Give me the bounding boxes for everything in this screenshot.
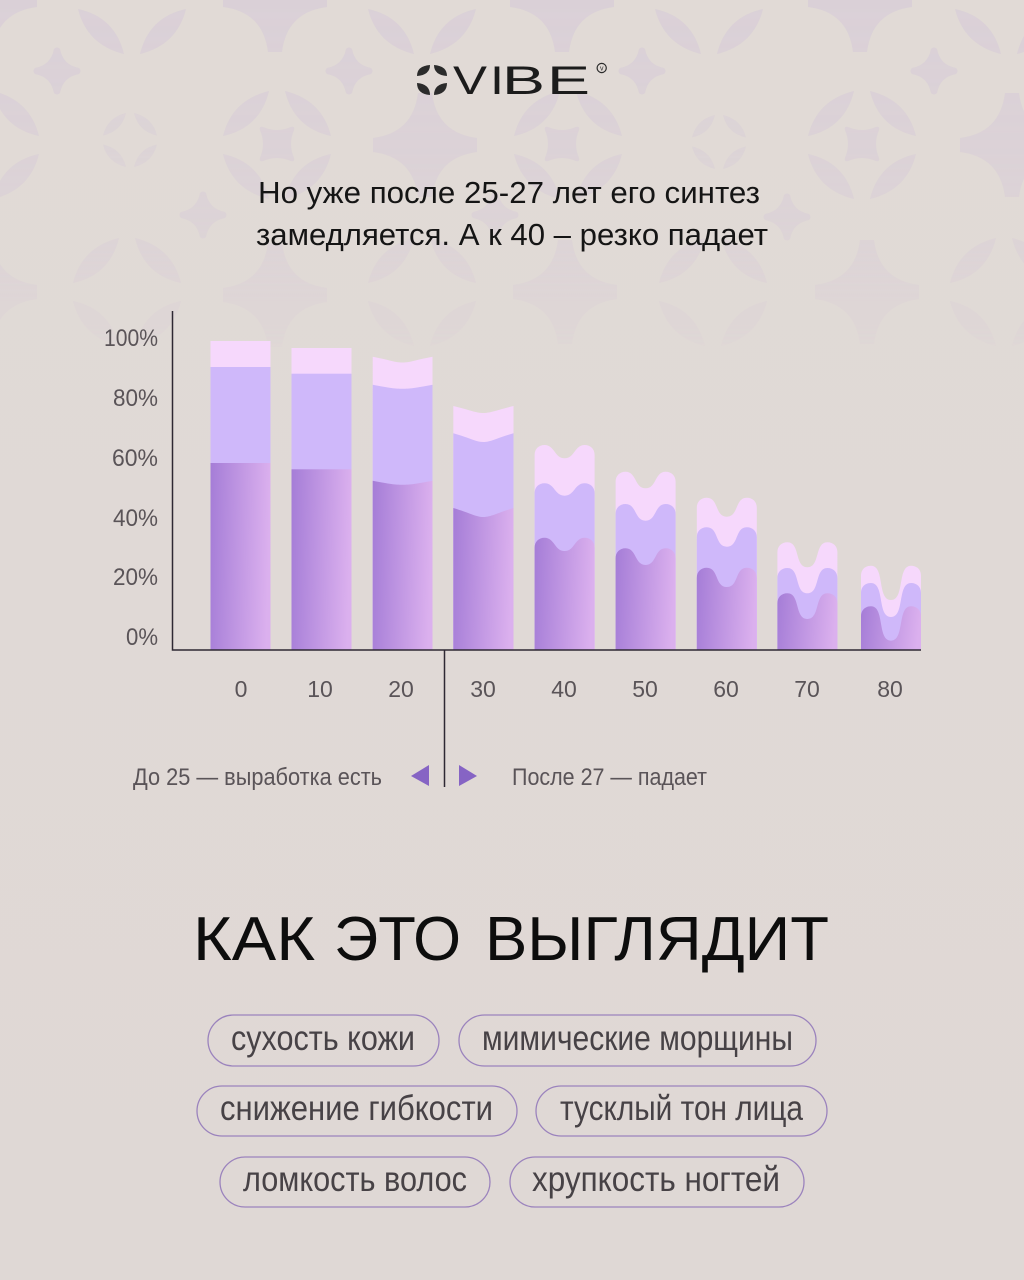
- x axis labels: 10: [307, 676, 333, 702]
- bar: age 80: [861, 566, 921, 650]
- x axis labels: 70: [794, 676, 820, 702]
- y axis labels: 60%: [112, 445, 158, 472]
- x axis labels: 30: [470, 676, 496, 702]
- bar: age 10: [292, 348, 352, 650]
- pill: brittle nails: хрупкость ногтей: [532, 1160, 780, 1199]
- logo wordmark: V: [453, 59, 487, 103]
- x axis labels: 20: [388, 676, 414, 702]
- y axis labels: 100%: [104, 325, 158, 352]
- chart axes: [172, 311, 921, 787]
- legend text: before 25: До 25 — выработка есть: [133, 764, 382, 791]
- x axis labels: [235, 676, 903, 702]
- bar: age 20: [373, 357, 432, 650]
- pill: brittle hair: [220, 1157, 490, 1207]
- legend: before and after: [133, 764, 707, 791]
- chart: stacked bars by age: [104, 311, 921, 787]
- y axis labels: 0%: [126, 624, 158, 651]
- pill: dry skin: [208, 1015, 439, 1066]
- background ornament pattern: [0, 0, 1024, 159]
- logo wordmark: I: [490, 59, 504, 103]
- bar: age 40: [535, 445, 595, 650]
- x axis labels: 50: [632, 676, 658, 702]
- logo wordmark: E: [547, 59, 590, 103]
- legend text: after 27: После 27 — падает: [512, 764, 707, 791]
- pill: expression wrinkles: мимические морщины: [482, 1019, 793, 1058]
- x axis labels: 60: [713, 676, 739, 702]
- y axis labels: 80%: [113, 385, 158, 412]
- heading: subtitle: [256, 175, 768, 252]
- logo: VIBE: [417, 59, 606, 103]
- arrow: left: [411, 765, 429, 786]
- symptom pills: [197, 1015, 827, 1207]
- bar: age 0: [210, 341, 270, 650]
- pill: reduced flexibility: снижение гибкости: [220, 1089, 493, 1128]
- arrow: right: [459, 765, 477, 786]
- bar: age 60: [697, 498, 757, 650]
- heading: how it looks: КАК: [193, 905, 315, 974]
- pill: dull complexion: тусклый тон лица: [560, 1089, 803, 1128]
- x axis labels: 0: [235, 676, 247, 702]
- heading: how it looks: ЭТО: [334, 905, 461, 974]
- y axis labels: [104, 325, 158, 651]
- pill: dry skin: сухость кожи: [231, 1019, 415, 1058]
- bar: age 70: [777, 542, 837, 650]
- logo wordmark: B: [502, 59, 545, 103]
- heading: how it looks: [193, 905, 829, 974]
- heading: subtitle: замедляется. А к 40 – резко падает: [256, 217, 768, 252]
- heading: how it looks: ВЫГЛЯДИТ: [485, 905, 829, 974]
- pill: brittle hair: ломкость волос: [243, 1160, 467, 1199]
- heading: subtitle: Но уже после 25-27 лет его синтез: [258, 175, 760, 210]
- pill: expression wrinkles: [459, 1015, 816, 1066]
- icon: registered mark: v: [600, 66, 604, 72]
- y axis labels: 40%: [113, 505, 158, 532]
- x axis labels: 80: [877, 676, 903, 702]
- icon: registered mark: [597, 63, 606, 73]
- pill: dull complexion: [536, 1086, 827, 1136]
- icon: logo four leaves: [417, 65, 447, 95]
- x axis labels: 40: [551, 676, 577, 702]
- bar: age 30: [453, 406, 514, 650]
- y axis labels: 20%: [113, 564, 158, 591]
- bar: age 50: [616, 472, 676, 650]
